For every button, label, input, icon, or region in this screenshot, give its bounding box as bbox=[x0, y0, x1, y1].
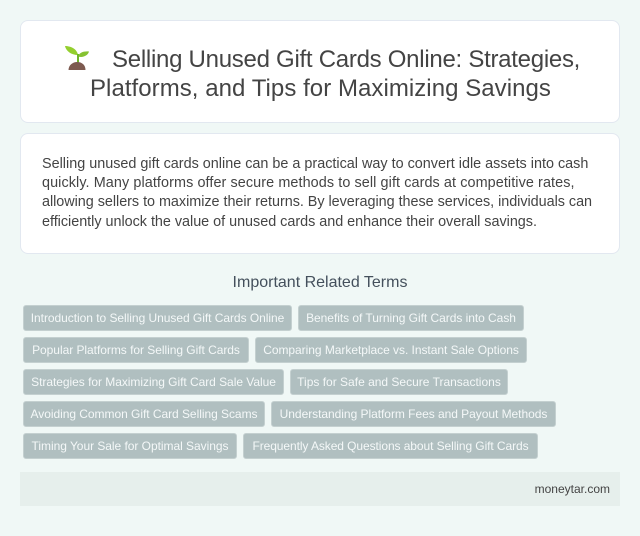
tag: Popular Platforms for Selling Gift Cards bbox=[32, 343, 240, 357]
tag: Avoiding Common Gift Card Selling Scams bbox=[30, 407, 257, 421]
tag: Comparing Marketplace vs. Instant Sale Options bbox=[263, 343, 519, 357]
tag list bbox=[23, 305, 556, 459]
intro paragraph: efficiently unlock the value of unused cards and enhance their overall savings. bbox=[42, 214, 537, 230]
tag bbox=[271, 401, 556, 427]
icon: seedling bbox=[65, 46, 89, 70]
tag bbox=[23, 433, 237, 459]
footer source: moneytar.com bbox=[535, 482, 610, 496]
tag: Frequently Asked Questions about Selling Gift Cards bbox=[252, 439, 529, 453]
title bbox=[90, 46, 580, 102]
tag: Strategies for Maximizing Gift Card Sale Value bbox=[31, 375, 276, 389]
tag: Tips for Safe and Secure Transactions bbox=[297, 375, 501, 389]
panel: title header bbox=[20, 20, 620, 123]
tag bbox=[243, 433, 538, 459]
tag bbox=[23, 305, 292, 331]
tag bbox=[298, 305, 524, 331]
tag bbox=[23, 401, 265, 427]
tag bbox=[255, 337, 527, 363]
tag bbox=[23, 337, 249, 363]
title: Selling Unused Gift Cards Online: Strategies, bbox=[112, 46, 580, 73]
tag: Introduction to Selling Unused Gift Cards Online bbox=[31, 311, 284, 325]
tag: Benefits of Turning Gift Cards into Cash bbox=[306, 311, 516, 325]
intro paragraph: Selling unused gift cards online can be a practical way to convert idle assets into cash bbox=[42, 156, 588, 172]
intro paragraph: allowing sellers to maximize their returns. By leveraging these services, individuals can bbox=[42, 194, 592, 210]
heading: related terms: Important Related Terms bbox=[233, 274, 407, 291]
footer bar bbox=[20, 472, 620, 506]
intro paragraph bbox=[42, 156, 592, 230]
tag bbox=[290, 369, 508, 395]
tag bbox=[23, 369, 284, 395]
panel: intro text bbox=[20, 133, 620, 254]
tag: Timing Your Sale for Optimal Savings bbox=[32, 439, 228, 453]
intro paragraph: quickly. Many platforms offer secure methods to sell gift cards at competitive rates, bbox=[42, 175, 575, 191]
tag: Understanding Platform Fees and Payout Methods bbox=[280, 407, 547, 421]
title: Platforms, and Tips for Maximizing Savings bbox=[90, 75, 551, 102]
